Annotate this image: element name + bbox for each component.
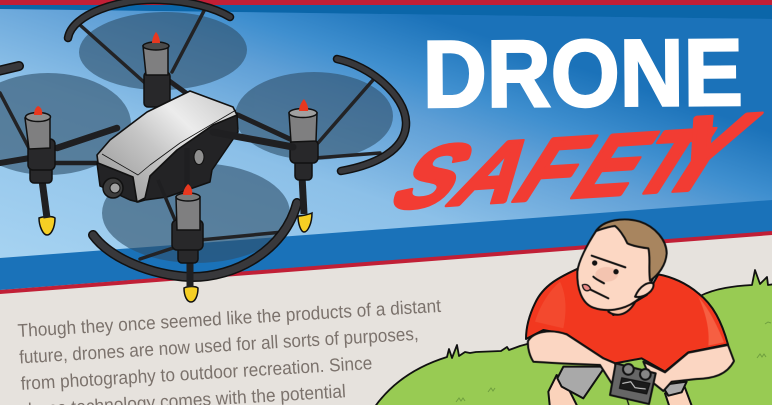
title: SAFETY: SAFETY [370, 90, 772, 232]
remote controller [610, 363, 656, 405]
propeller discs [0, 11, 393, 263]
arm right [643, 345, 734, 391]
intro text: from photography to outdoor recreation. Since [20, 352, 373, 394]
guard struts [0, 9, 380, 259]
motor: left [25, 106, 55, 183]
red shirt [526, 268, 728, 372]
shorts [557, 367, 687, 398]
intro text: future, drones are now used for all sorts of purposes, [19, 323, 419, 367]
ear [635, 283, 654, 297]
illustration: grass [374, 270, 772, 405]
propeller guards [0, 0, 406, 277]
grass tufts [456, 322, 771, 402]
arm left [528, 331, 617, 383]
intro text [17, 295, 446, 405]
illustration: man with remote [526, 219, 734, 405]
banner [0, 0, 772, 294]
illustration: drone [0, 0, 406, 302]
neck [608, 300, 635, 315]
face [582, 256, 625, 298]
drone body [97, 91, 293, 220]
motor: bottom [172, 184, 203, 263]
title: DRONE: DRONE [422, 20, 743, 128]
legs [548, 375, 693, 405]
landing legs [42, 176, 304, 287]
drone feet [39, 213, 312, 302]
head [577, 223, 657, 310]
motor: right [289, 99, 318, 180]
shirt highlights [535, 282, 724, 346]
intro text: Though they once seemed like the products of a distant [17, 295, 441, 341]
motor: top [143, 32, 170, 107]
drone arms [0, 80, 292, 163]
hair [596, 219, 667, 281]
